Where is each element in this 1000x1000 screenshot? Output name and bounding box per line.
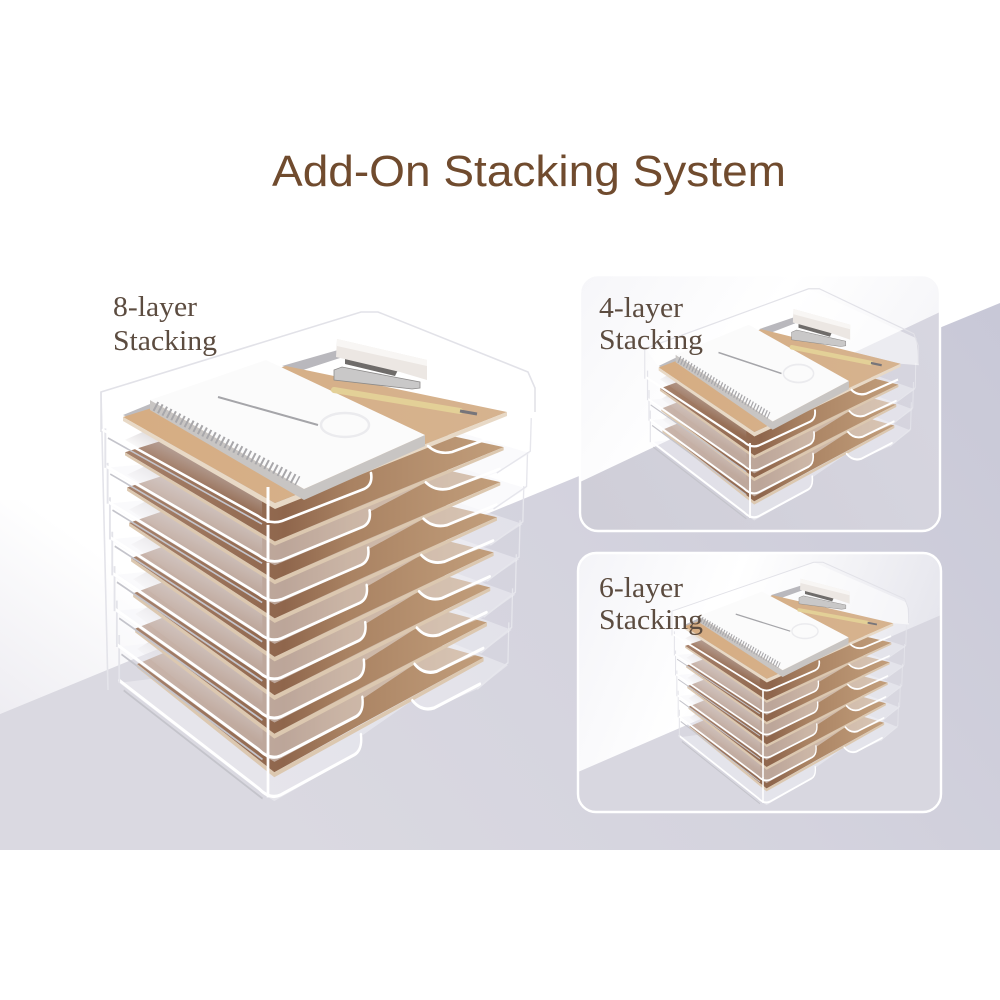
panel: 4-layer stacking (580, 275, 940, 531)
label: 6-layer stacking: 6-layer (599, 573, 684, 604)
title: Add-On Stacking System (272, 147, 786, 196)
panel border 6-layer (578, 553, 941, 812)
4-layer stack (645, 289, 919, 520)
label: 8-layer stacking: 8-layer (113, 292, 198, 323)
6-layer stack (672, 562, 909, 805)
panel border 4-layer (580, 275, 940, 531)
infographic canvas (0, 154, 1000, 850)
label: 4-layer stacking: Stacking (599, 325, 703, 356)
label: 4-layer stacking: 4-layer (599, 293, 684, 324)
label: 8-layer stacking: Stacking (113, 326, 217, 357)
label: 6-layer stacking: Stacking (599, 605, 703, 636)
photo backdrop: lavender surface (0, 303, 1000, 850)
photo backdrop: wall shading (0, 500, 520, 714)
panel background 4-layer (580, 275, 940, 531)
8-layer stack (101, 312, 536, 801)
panel background 6-layer (579, 554, 940, 772)
panel: 6-layer stacking (578, 553, 941, 812)
